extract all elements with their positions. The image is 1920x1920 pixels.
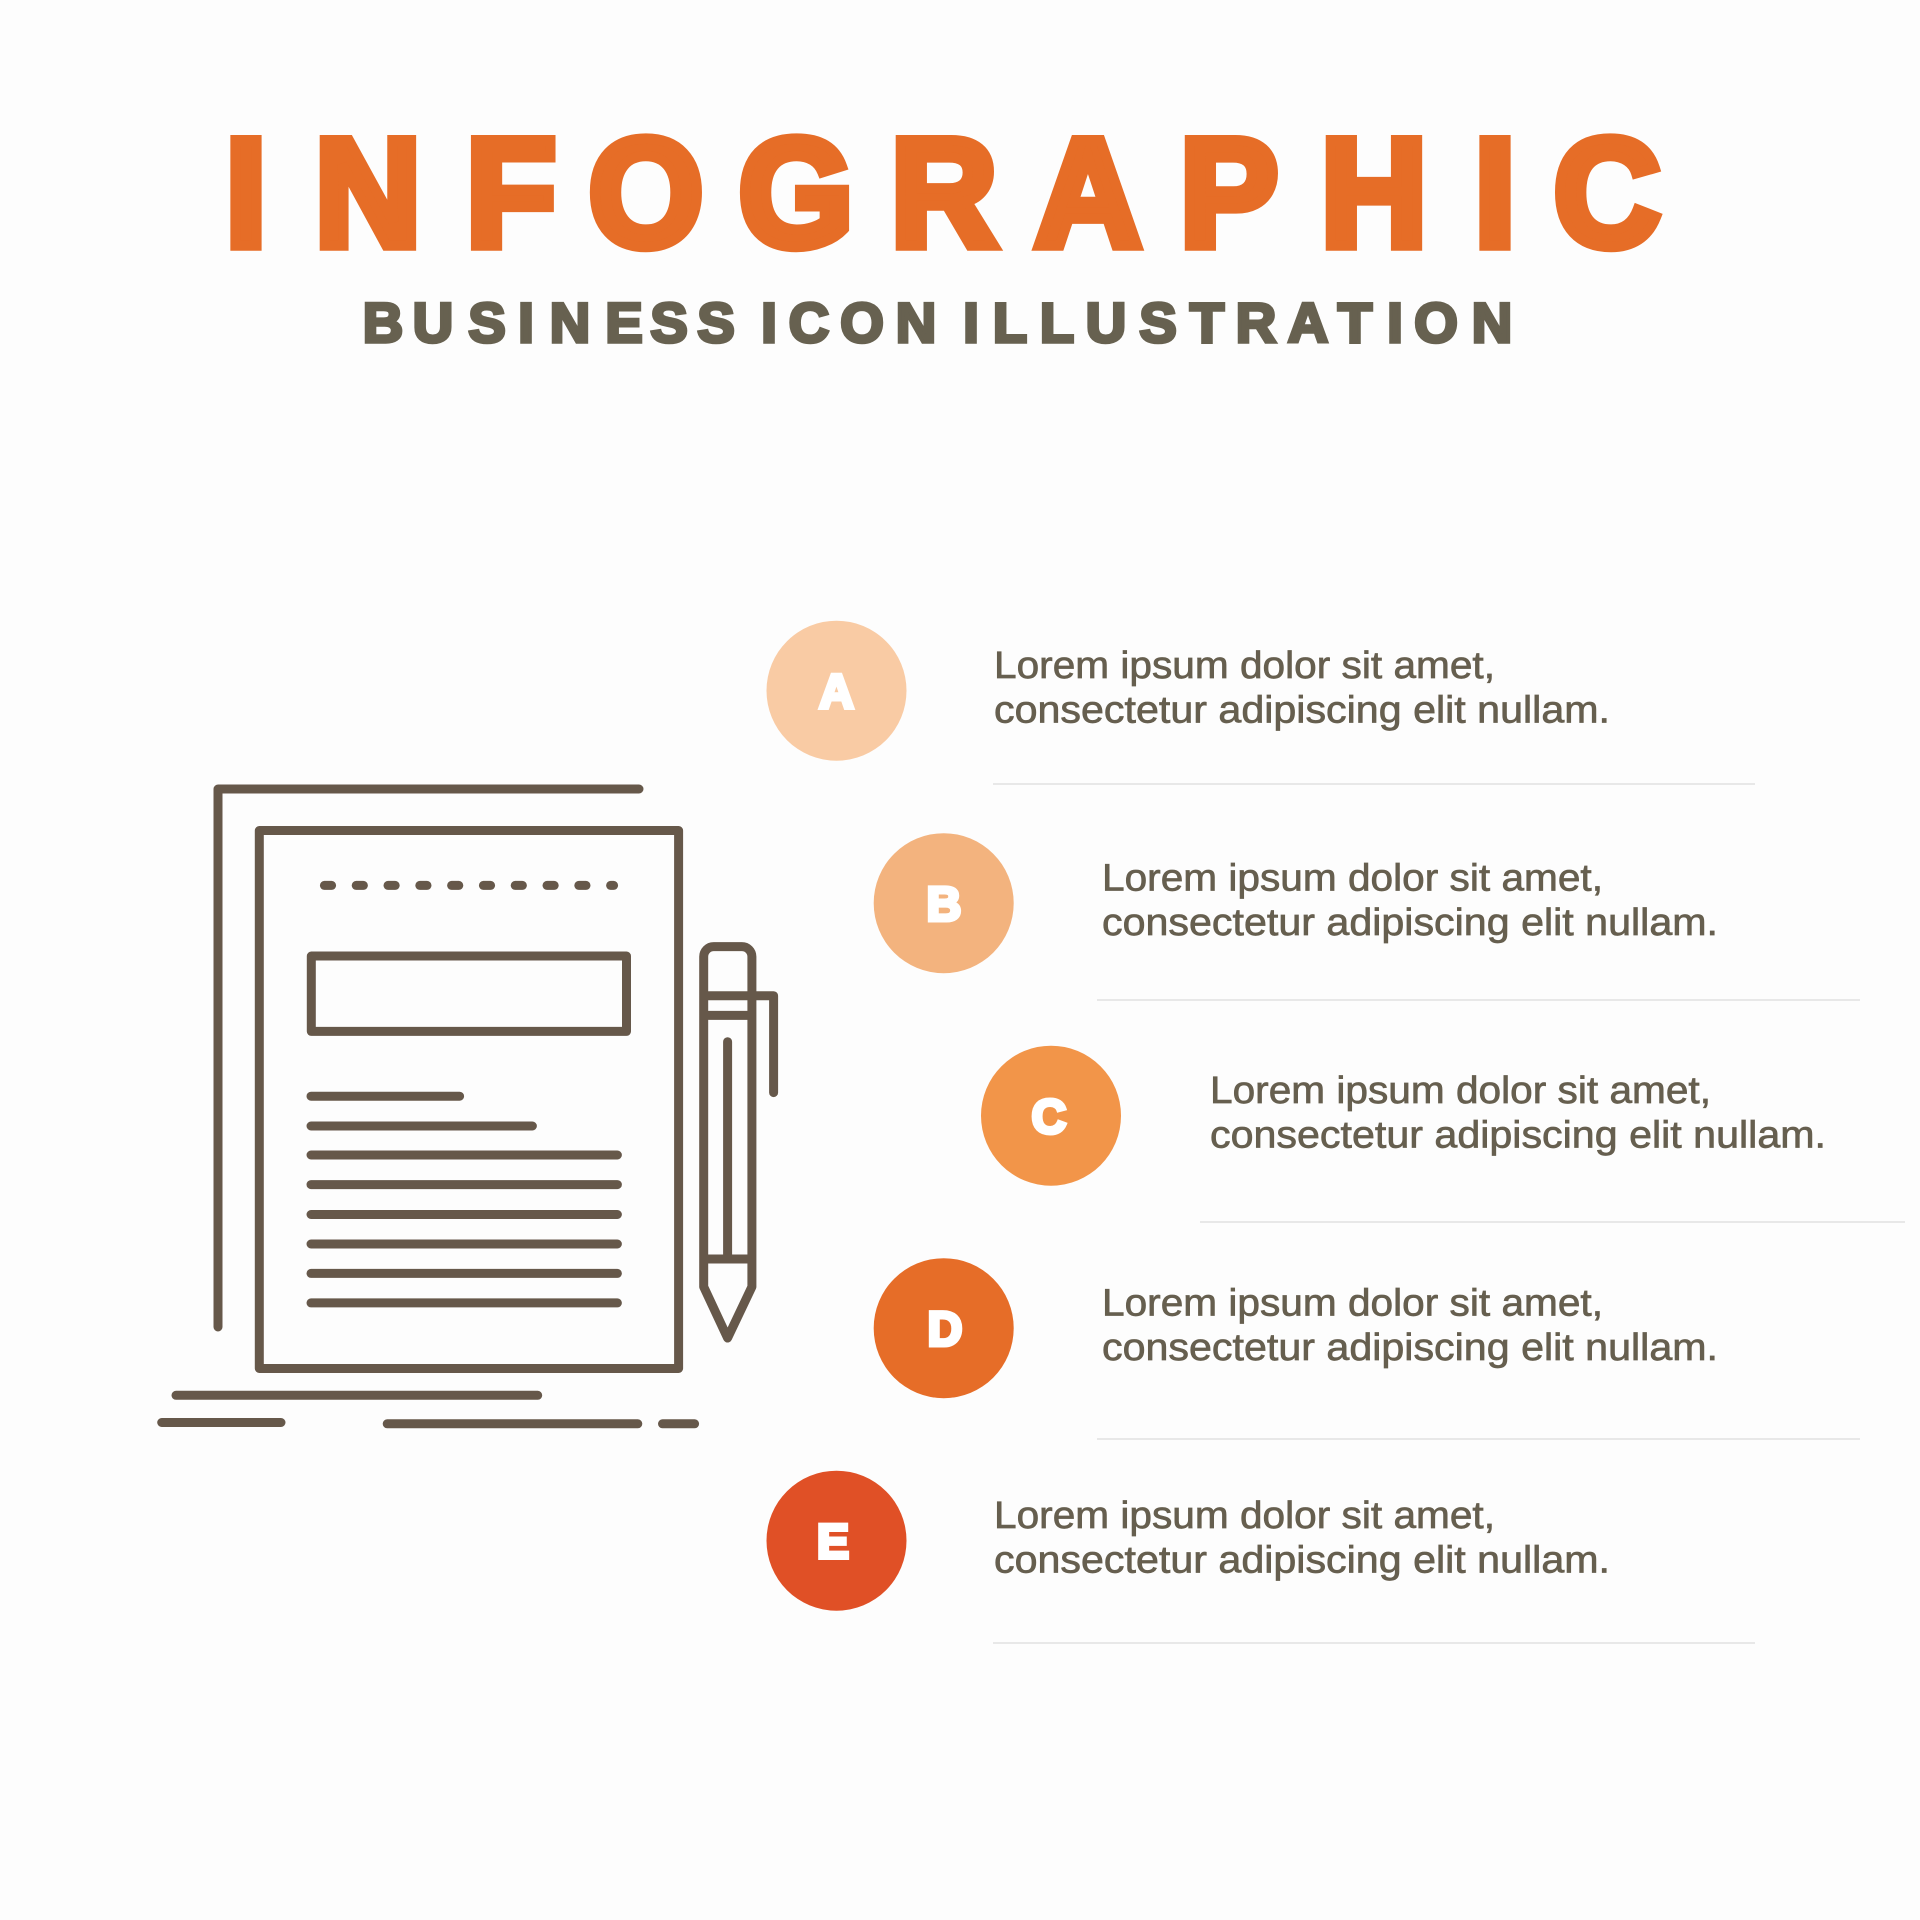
- title: INFOGRAPHIC: [226, 107, 1660, 278]
- circle C: [981, 1046, 1121, 1186]
- letter E: E: [817, 1516, 849, 1569]
- letter C: C: [1032, 1091, 1066, 1144]
- icon: document and pencil: [162, 789, 774, 1424]
- text lines: [311, 1096, 617, 1303]
- text C: Lorem ipsum dolor sit amet,: [1210, 1070, 1711, 1112]
- circle D: [874, 1258, 1014, 1398]
- text E: Lorem ipsum dolor sit amet,: [994, 1495, 1495, 1537]
- item B: [874, 833, 1860, 1001]
- letter D: D: [928, 1304, 962, 1357]
- item D: [874, 1258, 1860, 1440]
- text B: consectetur adipiscing elit nullam.: [1102, 902, 1718, 944]
- text C: consectetur adipiscing elit nullam.: [1210, 1115, 1826, 1157]
- text D: Lorem ipsum dolor sit amet,: [1102, 1282, 1603, 1324]
- letter B: B: [927, 879, 961, 932]
- divider D: [1097, 1438, 1860, 1440]
- divider C: [1200, 1221, 1905, 1223]
- title box: [311, 956, 626, 1031]
- divider E: [993, 1642, 1755, 1644]
- back page outline: [218, 789, 639, 1327]
- text A: consectetur adipiscing elit nullam.: [994, 690, 1610, 732]
- front page: [259, 830, 679, 1368]
- circle B: [874, 833, 1014, 973]
- letter A: A: [819, 666, 854, 719]
- text B: Lorem ipsum dolor sit amet,: [1102, 858, 1603, 900]
- dashed header line: [324, 881, 614, 890]
- pencil: [704, 947, 774, 1338]
- item C: [981, 1046, 1905, 1223]
- divider B: [1097, 999, 1860, 1001]
- item A: [766, 621, 1755, 785]
- text D: consectetur adipiscing elit nullam.: [1102, 1327, 1718, 1369]
- circle E: [766, 1471, 906, 1611]
- item E: [766, 1471, 1755, 1644]
- ground lines: [162, 1395, 695, 1424]
- circle A: [766, 621, 906, 761]
- text E: consectetur adipiscing elit nullam.: [994, 1540, 1610, 1582]
- subtitle: BUSINESS ICON ILLUSTRATION: [363, 291, 1512, 354]
- text A: Lorem ipsum dolor sit amet,: [994, 645, 1495, 687]
- divider A: [993, 783, 1755, 785]
